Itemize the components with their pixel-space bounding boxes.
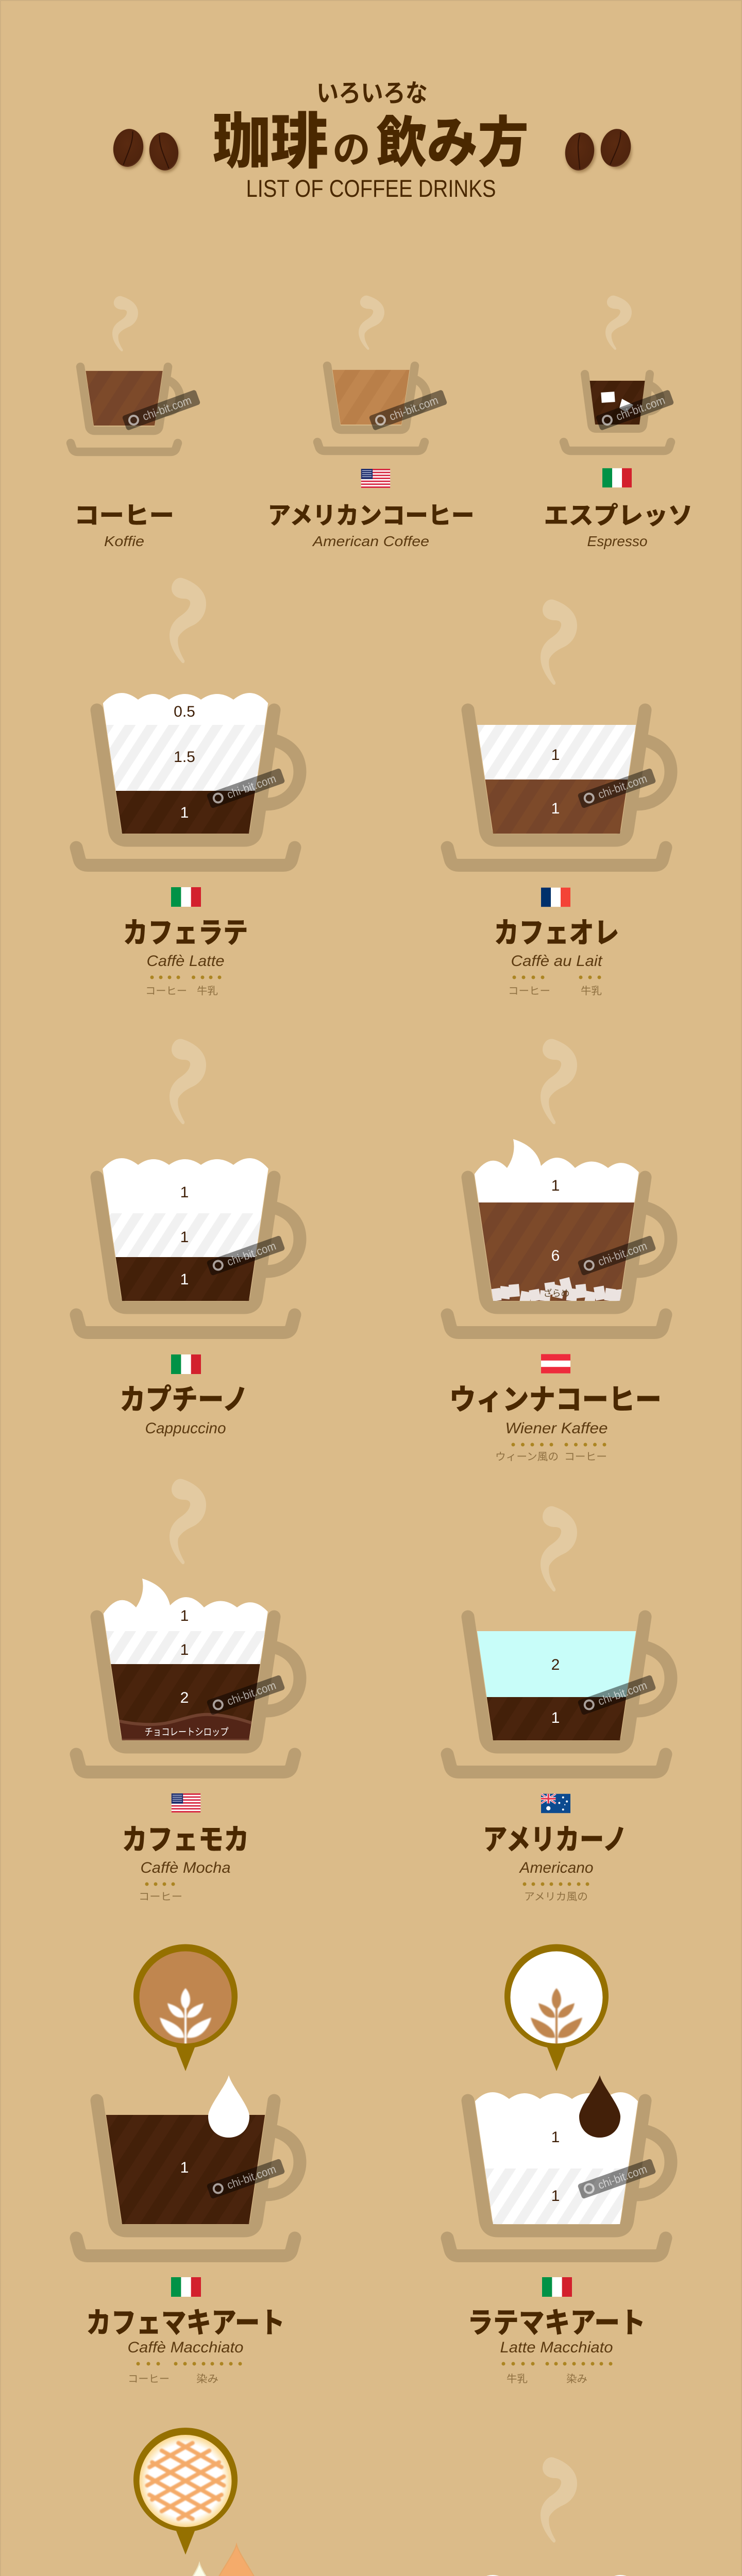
watermark: chi-bit.com xyxy=(596,1239,649,1268)
flag: Austria xyxy=(541,1354,570,1374)
panel: coffee xyxy=(71,296,201,549)
steam xyxy=(541,1506,577,1591)
panel: americano xyxy=(447,1506,671,1903)
etymology text xyxy=(495,1451,607,1463)
english name: Koffie xyxy=(104,533,144,549)
watermark xyxy=(577,768,656,809)
ratios: 2 xyxy=(551,1656,560,1673)
panel: cappuccino xyxy=(76,1039,300,1437)
etymology text: コーヒー xyxy=(139,1891,182,1903)
panel: caffe mocha xyxy=(76,1479,300,1903)
chocolate syrup label: チョコレートシロップ xyxy=(144,1726,229,1738)
etymology text xyxy=(128,2373,218,2385)
english name: Wiener Kaffee xyxy=(505,1420,608,1437)
ratios: 0.5 xyxy=(174,703,195,720)
ratios: 1 xyxy=(551,747,560,764)
flag: France xyxy=(541,888,570,907)
etymology text: 染み xyxy=(566,2373,587,2385)
heading: main title xyxy=(212,108,529,176)
etymology text: コーヒー xyxy=(508,986,550,997)
etymology text xyxy=(507,2373,587,2385)
watermark: chi-bit.com xyxy=(225,1679,278,1708)
watermark xyxy=(206,768,285,809)
flag: Italy xyxy=(171,887,201,907)
heading: main title: 飲み方 xyxy=(376,113,529,174)
etymology dots xyxy=(512,976,601,979)
watermark xyxy=(595,389,674,431)
watermark: chi-bit.com xyxy=(225,772,278,801)
name: エスプレッソ xyxy=(544,502,693,529)
flag: Italy xyxy=(542,2277,572,2297)
ratios: 1 xyxy=(180,1271,189,1288)
flag: Italy xyxy=(602,468,632,487)
milk drop xyxy=(208,2075,249,2138)
etymology text: ウィーン風の xyxy=(495,1451,559,1463)
panel: american coffee xyxy=(268,296,474,549)
watermark: chi-bit.com xyxy=(225,2162,278,2192)
watermark: chi-bit.com xyxy=(596,1679,649,1708)
steam xyxy=(170,578,206,663)
watermark xyxy=(577,1235,656,1276)
watermark xyxy=(122,389,201,431)
english name: Caffè Mocha xyxy=(140,1859,231,1876)
cup xyxy=(317,366,427,451)
etymology dots xyxy=(511,1443,606,1447)
ratios xyxy=(174,703,195,821)
watermark xyxy=(577,1674,656,1716)
etymology dots xyxy=(145,1883,175,1886)
panel: flat white xyxy=(486,2458,627,2576)
etymology text: 牛乳 xyxy=(507,2373,528,2385)
watermark xyxy=(577,2158,656,2199)
title block xyxy=(111,80,634,202)
heading: english subtitle: LIST OF COFFEE DRINKS xyxy=(246,175,496,202)
flag: Australia xyxy=(541,1794,570,1813)
ratios xyxy=(551,1656,560,1726)
latte art balloon xyxy=(133,1944,238,2071)
cup with layers xyxy=(76,1158,300,1332)
cup xyxy=(564,374,671,451)
cup with layers xyxy=(447,1617,671,1772)
steam xyxy=(541,600,577,685)
watermark: chi-bit.com xyxy=(614,394,667,423)
cup with layers xyxy=(447,1139,671,1332)
english name: Americano xyxy=(519,1859,594,1876)
icon: coffee beans left xyxy=(111,127,182,175)
watermark: chi-bit.com xyxy=(387,394,440,423)
name: カプチーノ xyxy=(120,1383,248,1416)
etymology text: 染み xyxy=(196,2373,218,2385)
steam xyxy=(170,1479,206,1564)
name: カフェマキアート xyxy=(86,2307,285,2339)
watermark xyxy=(368,389,448,431)
cup with layers xyxy=(447,2092,671,2256)
sugar label: ざらめ xyxy=(543,1288,570,1298)
heading: main title: の xyxy=(332,128,370,171)
etymology dots xyxy=(522,1883,589,1886)
icon: coffee beans right xyxy=(563,127,634,175)
ratios xyxy=(180,1184,189,1288)
caramel art balloon xyxy=(133,2428,238,2554)
ratios: 1 xyxy=(551,1709,560,1726)
name: ラテマキアート xyxy=(467,2307,646,2339)
panel: espresso xyxy=(544,296,693,549)
etymology text: コーヒー xyxy=(128,2374,170,2385)
watermark: chi-bit.com xyxy=(141,394,193,423)
steam xyxy=(112,296,138,351)
ratios xyxy=(551,2129,560,2205)
etymology dots xyxy=(136,2362,242,2366)
steam xyxy=(541,1039,577,1124)
ratios: 1 xyxy=(180,1607,189,1624)
vanilla syrup drop xyxy=(177,2563,222,2576)
watermark: chi-bit.com xyxy=(596,772,649,801)
ratios: 1.5 xyxy=(174,749,195,766)
watermark: chi-bit.com xyxy=(596,2162,649,2192)
name: アメリカンコーヒー xyxy=(268,502,474,529)
etymology text: 牛乳 xyxy=(197,985,218,997)
ratios: 1 xyxy=(551,2188,560,2205)
flag: Italy xyxy=(171,2277,201,2297)
ratios xyxy=(551,1177,560,1264)
watermark xyxy=(206,1235,285,1276)
cup with layers xyxy=(486,2575,627,2576)
caramel sauce drop xyxy=(214,2545,259,2576)
english name: Espresso xyxy=(587,533,647,549)
ratio: 1 xyxy=(180,2159,189,2176)
coffee drop xyxy=(579,2075,620,2138)
ratios xyxy=(180,1607,189,1706)
cup with layers xyxy=(447,710,671,866)
english name: Caffè Latte xyxy=(146,953,225,970)
etymology dots xyxy=(502,2362,612,2366)
cup with layers xyxy=(76,1579,300,1772)
ratios: 1 xyxy=(180,1641,189,1658)
ratios: 1 xyxy=(551,1177,560,1194)
etymology text xyxy=(145,985,218,997)
ice cubes xyxy=(601,392,633,412)
panel: cafe au lait xyxy=(447,600,671,997)
cup with layers xyxy=(76,693,300,866)
ratios xyxy=(551,747,560,817)
etymology text: 牛乳 xyxy=(581,985,602,997)
watermark xyxy=(206,1674,285,1716)
ratios: 1 xyxy=(551,2129,560,2146)
panel: wiener kaffee xyxy=(447,1039,671,1463)
name: カフェモカ xyxy=(122,1823,249,1856)
name: ウィンナコーヒー xyxy=(449,1383,662,1416)
steam xyxy=(170,1039,206,1124)
english name: American Coffee xyxy=(312,533,429,549)
flag: Italy xyxy=(171,1354,201,1374)
etymology text: コーヒー xyxy=(145,986,187,997)
english name: Cappuccino xyxy=(145,1420,226,1437)
panel: caffe macchiato xyxy=(76,1944,300,2385)
heading: small kicker: いろいろな xyxy=(316,80,428,107)
english name: Caffè Macchiato xyxy=(128,2339,243,2356)
english name: Caffè au Lait xyxy=(511,953,603,970)
steam xyxy=(541,2458,577,2543)
etymology text: アメリカ風の xyxy=(524,1891,588,1903)
watermark xyxy=(206,2158,285,2199)
watermark: chi-bit.com xyxy=(225,1239,278,1268)
steam xyxy=(359,296,384,350)
panel: latte macchiato xyxy=(447,1944,671,2385)
ratios: 1 xyxy=(180,804,189,821)
ratios: 1 xyxy=(180,1229,189,1246)
panel: caramel macchiato xyxy=(133,2428,255,2576)
ratios: 1 xyxy=(551,800,560,817)
ratios: 2 xyxy=(180,1689,189,1706)
cup xyxy=(71,367,180,452)
etymology text xyxy=(508,985,602,997)
english name: Latte Macchiato xyxy=(500,2339,613,2356)
panel: caffe latte xyxy=(76,578,300,997)
name: カフェラテ xyxy=(123,917,248,949)
flag: USA xyxy=(361,469,390,488)
etymology text: コーヒー xyxy=(564,1451,607,1463)
ratios: 1 xyxy=(180,1184,189,1201)
flag: USA xyxy=(172,1793,200,1812)
ratios: 6 xyxy=(551,1247,560,1264)
name: アメリカーノ xyxy=(483,1823,627,1856)
latte art balloon xyxy=(504,1944,609,2071)
steam xyxy=(605,296,632,350)
name: コーヒー xyxy=(74,502,174,529)
etymology dots xyxy=(150,976,222,979)
heading: main title: 珈琲 xyxy=(212,108,329,176)
name: カフェオレ xyxy=(494,917,619,949)
cup with layers xyxy=(76,2100,300,2256)
